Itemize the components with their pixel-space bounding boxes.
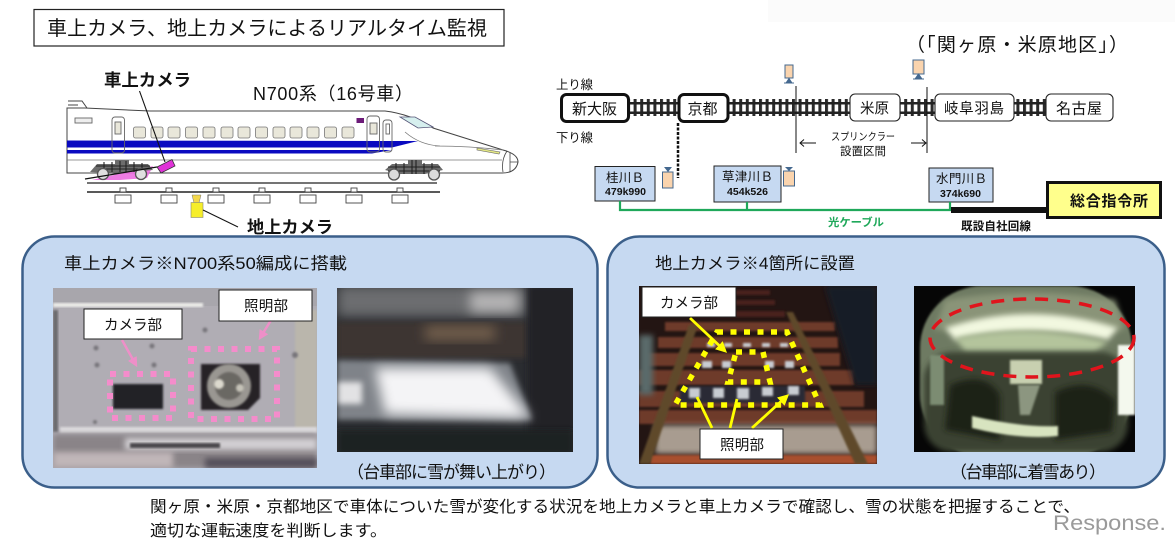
arrow: camera part bbox=[690, 318, 725, 351]
on-board camera label: 車上カメラ bbox=[104, 71, 191, 90]
up line label: 上り線 bbox=[556, 77, 593, 92]
caption: snow attached: （台車部に着雪あり） bbox=[950, 463, 1106, 482]
station: Nagoya bbox=[1046, 94, 1113, 121]
pantograph fin bbox=[68, 101, 87, 108]
station: Shin-Osaka: 新大阪 bbox=[572, 101, 617, 118]
magenta view wedge bbox=[92, 166, 153, 180]
station: Shin-Osaka bbox=[562, 94, 628, 122]
station: Kyoto: 京都 bbox=[688, 101, 718, 118]
sight line bbox=[85, 167, 157, 179]
bridge: Kusatsugawa bbox=[714, 166, 781, 202]
train body bbox=[67, 108, 518, 173]
station: Gifu-Hashima bbox=[935, 94, 1014, 121]
summary text: 適切な運転速度を判断します。 bbox=[150, 522, 387, 540]
red dashed ellipse bbox=[930, 299, 1134, 377]
existing line bbox=[951, 207, 1048, 213]
dotted trapezoid: lights bbox=[675, 332, 820, 405]
label: lighting part: 照明部 bbox=[244, 298, 288, 315]
label: lighting part: 照明部 bbox=[720, 437, 764, 454]
station: Maibara: 米原 bbox=[860, 100, 889, 118]
station: Nagoya: 名古屋 bbox=[1056, 100, 1102, 118]
icon: on-board camera bbox=[157, 160, 175, 173]
dotted link bbox=[677, 123, 679, 178]
panel: on-board camera bbox=[22, 236, 598, 488]
label: camera part bbox=[642, 287, 736, 317]
lower body line bbox=[67, 132, 503, 160]
label: lighting part bbox=[700, 429, 783, 459]
photo: on-board camera unit bbox=[53, 288, 317, 468]
track bbox=[628, 99, 1048, 116]
bridge: Katsuragawa bbox=[595, 166, 655, 201]
purple mark bbox=[356, 118, 364, 123]
windows bbox=[134, 127, 354, 138]
watermark: Response. bbox=[1053, 512, 1166, 535]
doors bbox=[75, 116, 392, 153]
arrows: lighting part bbox=[697, 396, 787, 428]
dotted frame: camera part bbox=[110, 374, 173, 418]
dotted trapezoid: camera bbox=[728, 352, 770, 382]
bridge: Katsuragawa: 479k990 bbox=[605, 186, 646, 198]
panel heading: 地上カメラ※4箇所に設置 bbox=[655, 254, 855, 273]
station: Kyoto bbox=[679, 94, 728, 122]
summary text: 関ヶ原・米原・京都地区で車体についた雪が変化する状況を地上カメラと車上カメラで確認し、雪の状態を把握することで、 bbox=[150, 498, 1080, 516]
general control center: 総合指令所 bbox=[1070, 192, 1148, 210]
photo: snow under bogie bbox=[337, 285, 576, 455]
panel heading: 車上カメラ※N700系50編成に搭載 bbox=[64, 254, 347, 273]
dotted frame: lighting part bbox=[191, 349, 277, 419]
label: lighting part bbox=[219, 290, 312, 321]
sprinkler section markers bbox=[796, 86, 927, 153]
label: camera part: カメラ部 bbox=[660, 295, 718, 312]
panel: ground camera bbox=[608, 236, 1164, 488]
bridge: Kusatsugawa: 草津川Ｂ bbox=[722, 170, 773, 184]
windshield bbox=[400, 117, 433, 128]
left bogie bbox=[90, 160, 153, 180]
photo: snow on bogie bbox=[914, 286, 1135, 456]
sprinkler label line 2: 設置区間 bbox=[840, 145, 886, 158]
icon: camera Kusatsugawa bbox=[784, 167, 794, 186]
icon: ground camera bbox=[191, 195, 203, 218]
optical cable label: 光ケーブル bbox=[828, 215, 884, 229]
route heading: （「関ヶ原・米原地区」） bbox=[906, 34, 1128, 56]
train diagram bbox=[67, 101, 518, 203]
icon: camera top right bbox=[913, 60, 924, 79]
train model label: N700系（16号車） bbox=[253, 84, 413, 104]
sleepers bbox=[115, 188, 408, 203]
existing line label: 既設自社回線 bbox=[961, 219, 1032, 233]
caption: snow stirred up: （台車部に雪が舞い上がり） bbox=[347, 463, 556, 482]
title bbox=[34, 10, 504, 46]
route map bbox=[556, 60, 1160, 233]
right bogie bbox=[385, 160, 443, 180]
bridge: Suimongawa bbox=[929, 168, 993, 202]
title: 車上カメラ、地上カメラによるリアルタイム監視 bbox=[47, 17, 487, 40]
station: Maibara bbox=[850, 94, 900, 121]
bridge: Katsuragawa: 桂川Ｂ bbox=[606, 170, 644, 185]
bridge: Kusatsugawa: 454k526 bbox=[727, 186, 768, 198]
general control center bbox=[1048, 182, 1160, 218]
icon: camera Katsuragawa bbox=[662, 167, 673, 188]
pointer line to ground camera bbox=[203, 210, 238, 227]
label: camera part: カメラ部 bbox=[104, 317, 162, 334]
station: Gifu-Hashima: 岐阜羽島 bbox=[944, 100, 1004, 118]
blue stripes bbox=[67, 140, 418, 154]
arrow: camera part bbox=[122, 340, 136, 365]
nose cap bbox=[502, 151, 518, 172]
bridge: Suimongawa: 374k690 bbox=[940, 188, 981, 200]
faint top-right band bbox=[768, 0, 1175, 22]
headlight bbox=[477, 148, 500, 154]
ground camera label: 地上カメラ bbox=[247, 218, 333, 237]
arrow: lighting part bbox=[260, 317, 273, 338]
optical cable bbox=[620, 201, 951, 210]
sprinkler label: スプリンクラー bbox=[831, 131, 895, 143]
summary text bbox=[150, 498, 1080, 540]
down line label: 下り線 bbox=[556, 130, 593, 145]
label: camera part bbox=[84, 309, 182, 339]
pointer line to on-board camera bbox=[140, 91, 165, 162]
rails bbox=[87, 183, 440, 192]
photo: ground camera array bbox=[639, 286, 877, 464]
icon: camera top left bbox=[784, 65, 794, 83]
bridge: Suimongawa: 水門川Ｂ bbox=[936, 172, 987, 186]
